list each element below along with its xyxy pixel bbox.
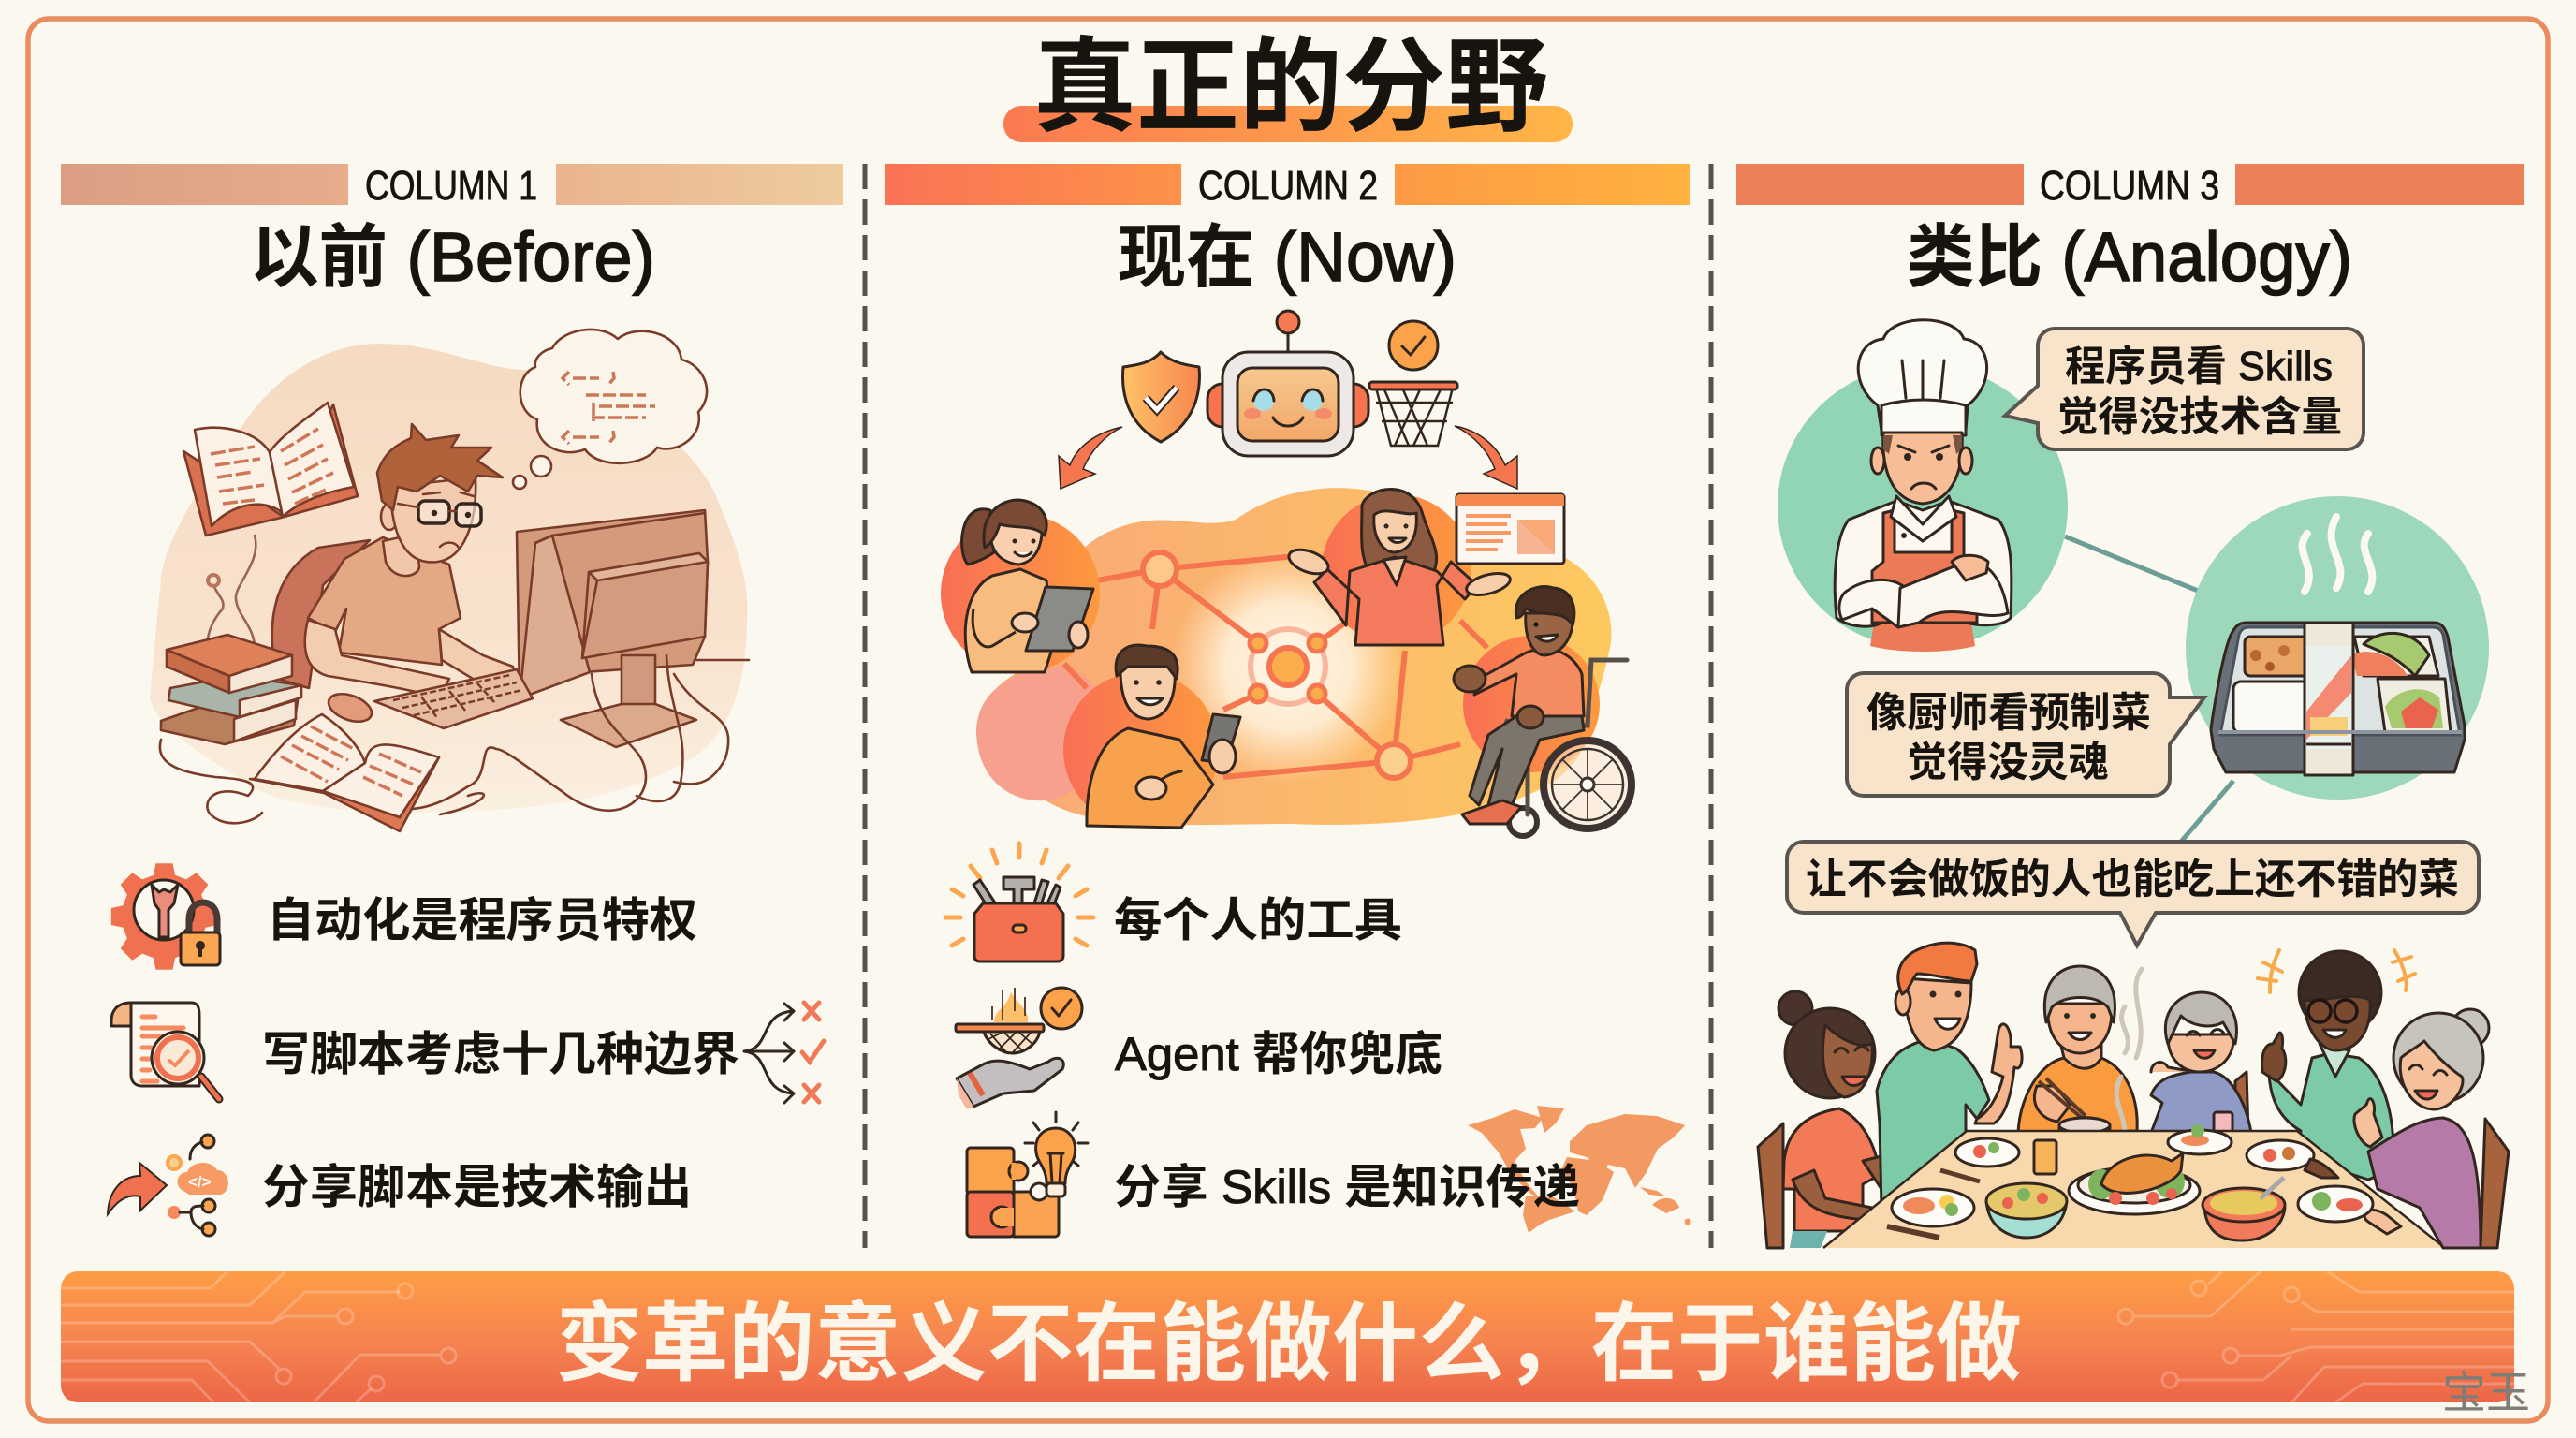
speech bubble: chef on prepared meals: 觉得没灵魂: [1907, 740, 2109, 785]
child eating: [2151, 992, 2251, 1140]
speech bubble: programmers on skills: 程序员看 Skills: [2065, 344, 2333, 389]
list item: knowledge sharing: [967, 1112, 1580, 1237]
illustration: frustrated programmer at desk: [150, 330, 749, 831]
item text: 自动化是程序员特权: [267, 894, 697, 946]
icon: share arrow cloud and nodes: [108, 1135, 228, 1236]
item text: 每个人的工具: [1114, 894, 1402, 946]
column 3 header bar: COLUMN 3: [2040, 163, 2219, 209]
item text: 分享脚本是技术输出: [262, 1161, 692, 1213]
salad bowl: [1986, 1201, 2067, 1238]
table: [1823, 1131, 2445, 1248]
sparkle marks: [2258, 950, 2415, 992]
item text: Agent 帮你兜底: [1115, 1028, 1442, 1080]
glass: [2034, 1140, 2056, 1174]
monitor: [517, 510, 708, 747]
person: girl with tablet: [941, 500, 1100, 673]
title highlight: [1003, 106, 1573, 142]
open book floating: [183, 403, 358, 536]
circuit pattern: [61, 1271, 2514, 1402]
robot: [1208, 311, 1368, 456]
window card: [1456, 494, 1564, 564]
steam: [2303, 517, 2372, 592]
food on table: [1887, 1124, 2373, 1240]
programmer body: [305, 424, 517, 697]
column 3 header bar: [1736, 163, 2524, 209]
cables: [160, 655, 728, 823]
watermark: 宝玉: [2442, 1368, 2530, 1417]
mouse: [325, 689, 375, 726]
person: woman with open arms: [1286, 489, 1513, 645]
panel: column 3 analogy: [1736, 163, 2524, 1248]
shield: [1123, 352, 1199, 442]
icon: branching outcomes: [744, 1003, 824, 1103]
network edges: [1064, 556, 1487, 777]
illustration: family dining together: [1758, 943, 2509, 1248]
world map: [1468, 1106, 1690, 1233]
steam: [2116, 969, 2142, 1147]
column 1 header bar: COLUMN 1: [365, 163, 537, 209]
thought cloud: [513, 330, 707, 489]
icon: script with magnifier: [111, 1003, 219, 1099]
speech bubble: chef on prepared meals: [1847, 673, 2204, 796]
roast turkey platter: [2069, 1167, 2200, 1214]
icon: toolbox with rays: [945, 844, 1093, 961]
illustration: robot and diverse people network: [941, 311, 1632, 836]
open book on desk: [250, 714, 439, 831]
speech bubble: programmers on skills: [2005, 329, 2364, 449]
speech bubble: chef on prepared meals: 像厨师看预制菜: [1866, 690, 2151, 736]
man thumbs up: [1877, 943, 2022, 1208]
chair: [272, 540, 370, 688]
keyboard: [374, 669, 533, 728]
panel: column 2 now: [885, 163, 1690, 1237]
list item: automation privilege: [111, 863, 697, 970]
icon: puzzle and light bulb: [967, 1112, 1088, 1237]
column 2 heading: 现在 (Now): [1118, 218, 1456, 296]
divider: column 2 and 3: [1709, 164, 1713, 1248]
bottom banner: [61, 1271, 2514, 1402]
column 2 header bar: [885, 163, 1690, 209]
chairs: [1758, 1119, 2509, 1248]
book stack: [161, 635, 301, 744]
connector: chef to meal: [2065, 536, 2198, 591]
panel: column 1 before: [61, 163, 843, 1236]
column 3 heading: 类比 (Analogy): [1907, 218, 2352, 296]
illustration: prepared meal box: [2186, 496, 2489, 800]
banner text: 变革的意义不在能做什么，在于谁能做: [556, 1297, 2022, 1392]
title text: 真正的分野: [1033, 30, 1548, 145]
older man with chopsticks: [2018, 966, 2137, 1152]
cord: [208, 536, 256, 655]
item text: 分享 Skills 是知识传递: [1114, 1161, 1580, 1213]
plates: [1892, 1189, 1974, 1226]
background blob: [976, 488, 1611, 825]
speech bubble: non-cooks can eat well: 让不会做饭的人也能吃上还不错的菜: [1806, 857, 2459, 902]
person: man with phone: [1063, 645, 1240, 828]
older woman: [2354, 1009, 2489, 1248]
column 2 header bar: COLUMN 2: [1198, 163, 1378, 209]
arrow: to right window: [1455, 426, 1517, 489]
speech bubble: programmers on skills: 觉得没技术含量: [2057, 394, 2342, 440]
arrow: to left person: [1059, 427, 1122, 489]
list item: tool for everyone: [945, 844, 1402, 961]
chopsticks: [1887, 1226, 1939, 1238]
network nodes: [1143, 552, 1411, 778]
connector: meal to diners: [2181, 781, 2233, 842]
woman with bowl: [1778, 991, 1956, 1248]
basketball hoop with check ball: [1369, 321, 1457, 446]
list item: agent backstop: [956, 988, 1442, 1109]
list item: script edge cases: [111, 1003, 824, 1103]
illustration: chef: [1778, 320, 2068, 652]
icon: share arrow cloud and nodes: </>: [188, 1173, 212, 1191]
divider: column 1 and 2: [863, 164, 867, 1248]
speech bubble: non-cooks can eat well: [1787, 842, 2479, 946]
man with glasses: [2262, 951, 2393, 1180]
column 1 header bar: [61, 163, 843, 209]
column 1 heading: 以前 (Before): [250, 218, 655, 296]
icon: net, flame and hand: [956, 988, 1082, 1109]
person: wheelchair user: [1454, 587, 1632, 836]
icon: gear with wrench and lock: [111, 863, 220, 970]
item text: 写脚本考虑十几种边界: [262, 1028, 739, 1080]
list item: sharing scripts: [108, 1135, 692, 1236]
title: [1003, 30, 1573, 145]
soup bowl: [2204, 1208, 2285, 1240]
